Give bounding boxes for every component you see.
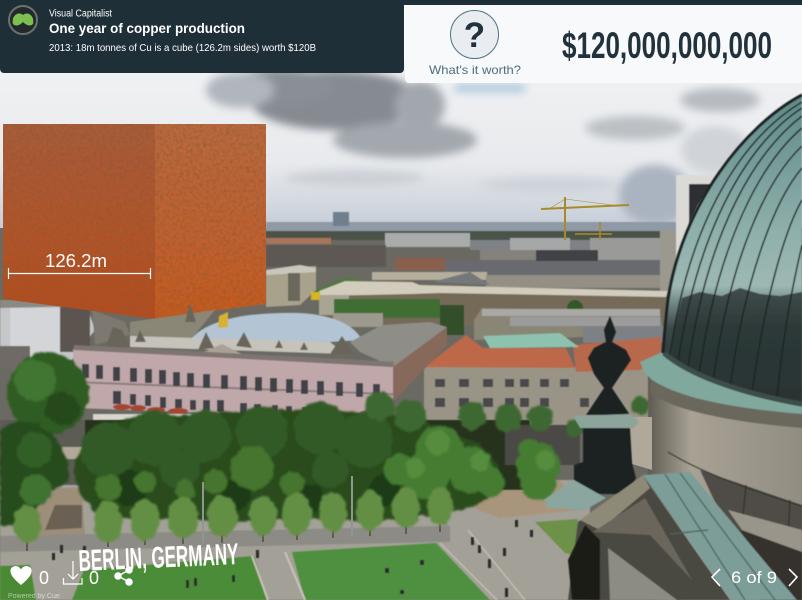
like count: 0 <box>39 568 49 588</box>
trees behind red-roofed building <box>365 391 649 437</box>
download count: 0 <box>89 568 99 588</box>
icon: question mark: ? <box>464 16 485 55</box>
icon: question mark <box>450 10 498 58</box>
small lawn by terrace <box>535 519 578 556</box>
pediment and green roof <box>568 472 797 600</box>
people <box>52 520 533 597</box>
powered by credit: Powered by Cue <box>8 593 60 600</box>
pillar with urn <box>544 316 639 510</box>
green metal roof <box>643 472 797 600</box>
mid-ground long flat-roofed building <box>319 281 668 343</box>
small trees row with trunks <box>13 476 453 551</box>
icon: share <box>115 567 132 585</box>
publisher name: Visual Capitalist <box>49 8 112 20</box>
cube dimension label: 126.2m <box>45 251 107 271</box>
museum flag far <box>311 292 320 300</box>
stone drum <box>648 372 802 600</box>
museum statues <box>106 303 354 354</box>
dome rail <box>664 353 802 404</box>
museum glass roof <box>192 313 362 342</box>
museum side roof <box>350 322 447 367</box>
icon: heart <box>10 566 32 585</box>
tree cluster far left <box>0 422 69 526</box>
left white office block <box>0 299 130 368</box>
crane <box>541 197 629 240</box>
lit trees centre right <box>384 426 560 500</box>
title: One year of copper production <box>49 20 245 36</box>
museum flag <box>218 312 228 328</box>
museum facade <box>73 349 393 418</box>
lawn left <box>0 565 36 600</box>
pagination <box>712 568 797 587</box>
left classical building <box>266 266 316 307</box>
logo <box>9 6 37 34</box>
lawn centre <box>72 556 268 600</box>
background: sky with clouds <box>0 60 802 230</box>
dome darkened lower tarnish <box>672 288 802 402</box>
header panel: value <box>405 5 802 83</box>
large tree left <box>7 353 89 435</box>
museum (Zeughaus) <box>73 292 447 422</box>
lawn right <box>292 543 490 600</box>
red-roofed building <box>424 333 664 429</box>
lawns <box>0 519 578 600</box>
tree canopy <box>0 353 649 526</box>
museum awnings <box>113 404 188 414</box>
header bar background strip <box>0 0 802 5</box>
museum pale roof <box>130 336 345 354</box>
cube right face <box>155 124 266 319</box>
dome <box>663 95 802 404</box>
icon: download <box>64 561 82 584</box>
subtitle: 2013: 18m tonnes of Cu is a cube (126.2m sides) worth $120B <box>49 42 316 54</box>
background: distant city <box>266 212 681 320</box>
what's it worth label: What's it worth? <box>429 63 521 77</box>
tree highlights dark mass <box>80 402 393 490</box>
paved square <box>0 420 590 600</box>
header panel: title block <box>0 0 404 73</box>
pagination: 6 of 9 <box>731 568 777 587</box>
cube dimension label <box>8 251 151 279</box>
background tall office building <box>676 175 716 260</box>
pale terrace behind pillar <box>628 417 652 470</box>
copper cube <box>3 124 266 319</box>
dome drum and ledge <box>640 352 802 600</box>
green ledge <box>640 352 802 414</box>
ground base <box>0 228 802 600</box>
location label: BERLIN, GERMANY <box>78 538 239 578</box>
cube left face <box>3 124 155 319</box>
dome ribs <box>670 102 802 398</box>
